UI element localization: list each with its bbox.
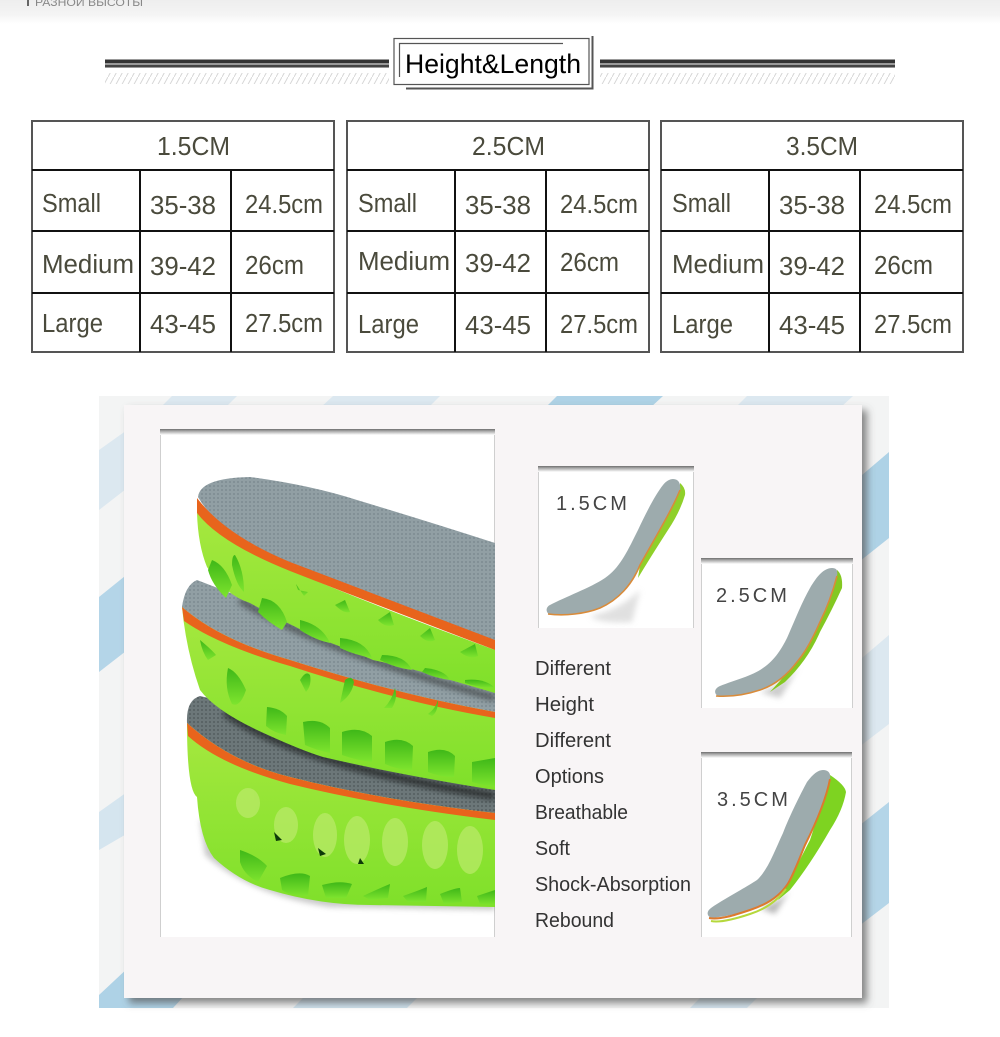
right rule [600, 59, 895, 84]
label: 3.5CM: 3.5CM [717, 789, 791, 811]
size table: 3.5CM: 24.5cm [874, 191, 952, 219]
panel: card [124, 405, 862, 998]
size table: 1.5CM: 24.5cm [245, 191, 323, 219]
feature list: Breathable [535, 802, 628, 824]
left rule [105, 59, 389, 84]
size table: 3.5CM: 43-45 [779, 312, 845, 340]
top insole [197, 477, 495, 698]
size table: 1.5CM [32, 121, 334, 352]
size table: 1.5CM: 43-45 [150, 311, 216, 339]
size table: 3.5CM: 39-42 [779, 253, 845, 281]
size table: 2.5CM: 27.5cm [560, 311, 638, 339]
size table: 2.5CM: Large [358, 311, 419, 339]
size table: 1.5CM: 35-38 [150, 192, 216, 220]
panel: striped background [99, 396, 889, 1008]
title box [394, 36, 592, 88]
feature list: Soft [535, 838, 570, 860]
feature list [535, 658, 691, 932]
size table: 1.5CM: Small [42, 190, 101, 218]
size table: 1.5CM: Medium [42, 251, 134, 279]
size table: 1.5CM: Large [42, 310, 103, 338]
size table: 1.5CM: 1.5CM [157, 133, 230, 161]
size table: 3.5CM: Medium [672, 251, 764, 279]
product image: 2.5CM insole [701, 558, 853, 708]
feature list: Rebound [535, 910, 614, 932]
feature list: Options [535, 766, 604, 788]
size table: 2.5CM [347, 121, 649, 352]
product image: 1.5CM insole [538, 466, 694, 628]
top band with clipped caption [0, 0, 1000, 24]
size table: 2.5CM: 2.5CM [472, 133, 545, 161]
main photo frame: stacked insoles [160, 429, 495, 937]
bottom insole [187, 696, 495, 910]
feature list: Different [535, 658, 611, 680]
size table: 3.5CM: 35-38 [779, 192, 845, 220]
label: 1.5CM: 1.5CM [556, 493, 630, 515]
feature list: Different [535, 730, 611, 752]
product image: 3.5CM insole [701, 752, 852, 937]
size table: 3.5CM: 27.5cm [874, 311, 952, 339]
size table: 2.5CM: Medium [358, 248, 450, 276]
size table: 3.5CM: Large [672, 311, 733, 339]
feature list: Shock-Absorption [535, 874, 691, 896]
size table: 1.5CM: 39-42 [150, 253, 216, 281]
size table: 2.5CM: 35-38 [465, 192, 531, 220]
size table: 1.5CM: 27.5cm [245, 310, 323, 338]
middle insole [182, 580, 495, 796]
size table: 2.5CM: 39-42 [465, 250, 531, 278]
size table: 2.5CM: 43-45 [465, 312, 531, 340]
title box: Height&Length [405, 49, 581, 79]
title: Height&Length banner [105, 36, 895, 88]
size table: 2.5CM: 26cm [560, 249, 619, 277]
size table: 3.5CM [661, 121, 963, 352]
label: 2.5CM: 2.5CM [716, 585, 790, 607]
size table: 3.5CM: 26cm [874, 252, 933, 280]
size table: 3.5CM: Small [672, 190, 731, 218]
size table: 1.5CM: 26cm [245, 252, 304, 280]
feature list: Height [535, 694, 594, 716]
size table: 2.5CM: 24.5cm [560, 191, 638, 219]
size table: 3.5CM: 3.5CM [786, 133, 858, 161]
size table: 2.5CM: Small [358, 190, 417, 218]
